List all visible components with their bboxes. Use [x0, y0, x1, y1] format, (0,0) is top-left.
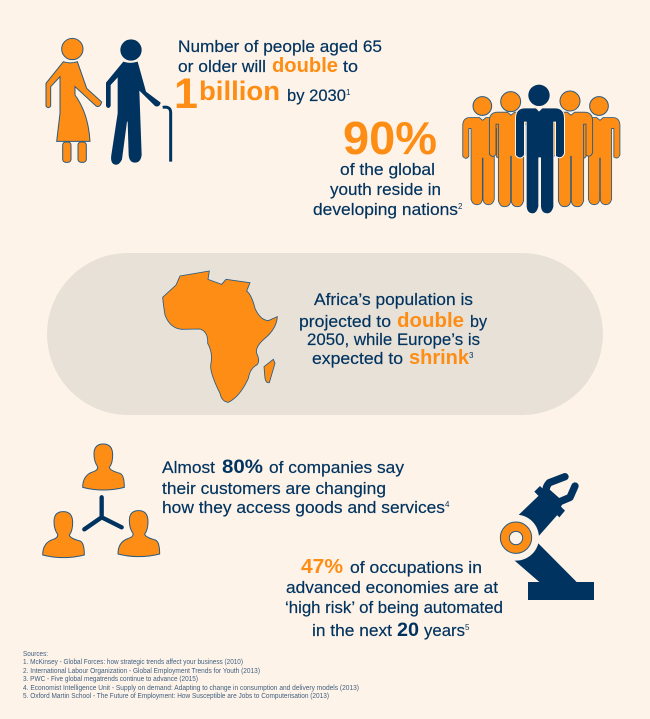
- text: sources: 3. PWC - Five global megatrends continue to advance (2015): [23, 676, 198, 683]
- icon: elderly woman: [46, 38, 102, 162]
- text: sources: 4. Economist Intelligence Unit - Supply on demand: Adapting to change in consumption and delivery models (2013): [23, 685, 359, 692]
- text: 47% of occupations: 5: [465, 623, 470, 632]
- text: Africa population: shrink: [409, 347, 470, 369]
- text: Africa population: 3: [469, 351, 474, 360]
- text: people aged 65: 1: [346, 88, 351, 97]
- text: 47% of occupations: advanced economies are at: [286, 578, 498, 597]
- icon: map of Africa: [163, 271, 277, 402]
- robot base: [528, 582, 594, 600]
- text: 47% of occupations: years: [424, 621, 465, 640]
- text: people aged 65: Number of people aged 65: [178, 37, 382, 56]
- icon: person right: [118, 511, 160, 557]
- text: 90% of youth: of the global: [340, 160, 435, 179]
- text: people aged 65: 1: [174, 70, 198, 118]
- text: 90% of youth: 90%: [343, 112, 437, 164]
- text: 90% of youth: developing nations: [313, 200, 458, 219]
- robot joint: [493, 515, 539, 561]
- text: sources: Sources:: [23, 651, 48, 658]
- text: Africa population: expected to: [312, 349, 403, 368]
- icon: group of youth: [463, 85, 620, 213]
- text: people aged 65: double: [272, 55, 338, 77]
- text: people aged 65: [174, 37, 382, 118]
- text: 80% of companies: how they access goods and services: [162, 498, 445, 517]
- text: Africa population: projected to: [299, 312, 391, 331]
- text: sources: [23, 651, 359, 700]
- figure: second left: [489, 92, 533, 207]
- text: 47% of occupations: 47%: [301, 556, 343, 578]
- text: 90% of youth: youth reside in: [330, 180, 441, 199]
- text: sources: 5. Oxford Martin School - The Future of Employment: How Susceptible are Jobs to Computerisation (2013): [23, 693, 329, 700]
- text: Africa population: double: [397, 309, 464, 332]
- text: 80% of companies: of companies say: [269, 458, 405, 477]
- text: Africa population: [299, 290, 487, 369]
- text: sources: 2. International Labour Organization - Global Employment Trends for Youth (2013): [23, 668, 260, 675]
- robot upper arm and claw: [513, 477, 575, 538]
- text: 80% of companies: [162, 457, 450, 517]
- robot lower arm: [510, 538, 577, 582]
- icon: robot arm: [493, 477, 594, 600]
- text: Africa population: Africa’s population is: [314, 290, 473, 309]
- panel: Africa population: [47, 253, 603, 415]
- text: 90% of youth: [313, 112, 463, 219]
- text: people aged 65: to: [343, 57, 358, 76]
- text: 80% of companies: 4: [445, 500, 450, 509]
- text: 47% of occupations: of occupations in: [350, 558, 482, 577]
- figure: far right: [580, 97, 620, 205]
- icon: elderly man with cane: [106, 39, 171, 165]
- text: Africa population: by: [470, 312, 487, 331]
- text: sources: 1. McKinsey - Global Forces: how strategic trends affect your business (2010): [23, 659, 243, 666]
- text: 80% of companies: 80%: [222, 457, 263, 478]
- icon: person left: [43, 512, 84, 558]
- text: 47% of occupations: ‘high risk’ of being automated: [285, 598, 503, 617]
- text: 47% of occupations: in the next: [312, 621, 392, 640]
- figure: second right: [549, 91, 593, 207]
- text: 90% of youth: 2: [458, 202, 463, 211]
- icon: elderly couple: [46, 38, 171, 165]
- icon: connector: [84, 497, 122, 529]
- icon: person top: [83, 444, 124, 490]
- figure: far left: [463, 97, 503, 205]
- text: 47% of occupations: [285, 556, 503, 641]
- text: people aged 65: by 2030: [287, 86, 346, 105]
- text: people aged 65: billion: [199, 76, 280, 106]
- text: 80% of companies: their customers are changing: [162, 479, 386, 498]
- text: 47% of occupations: 20: [397, 620, 419, 641]
- text: people aged 65: or older will: [178, 57, 266, 76]
- text: Africa population: 2050, while Europe’s is: [307, 330, 480, 349]
- figure: centre navy: [516, 85, 564, 213]
- text: 80% of companies: Almost: [162, 458, 215, 477]
- icon: connected people: [43, 444, 160, 558]
